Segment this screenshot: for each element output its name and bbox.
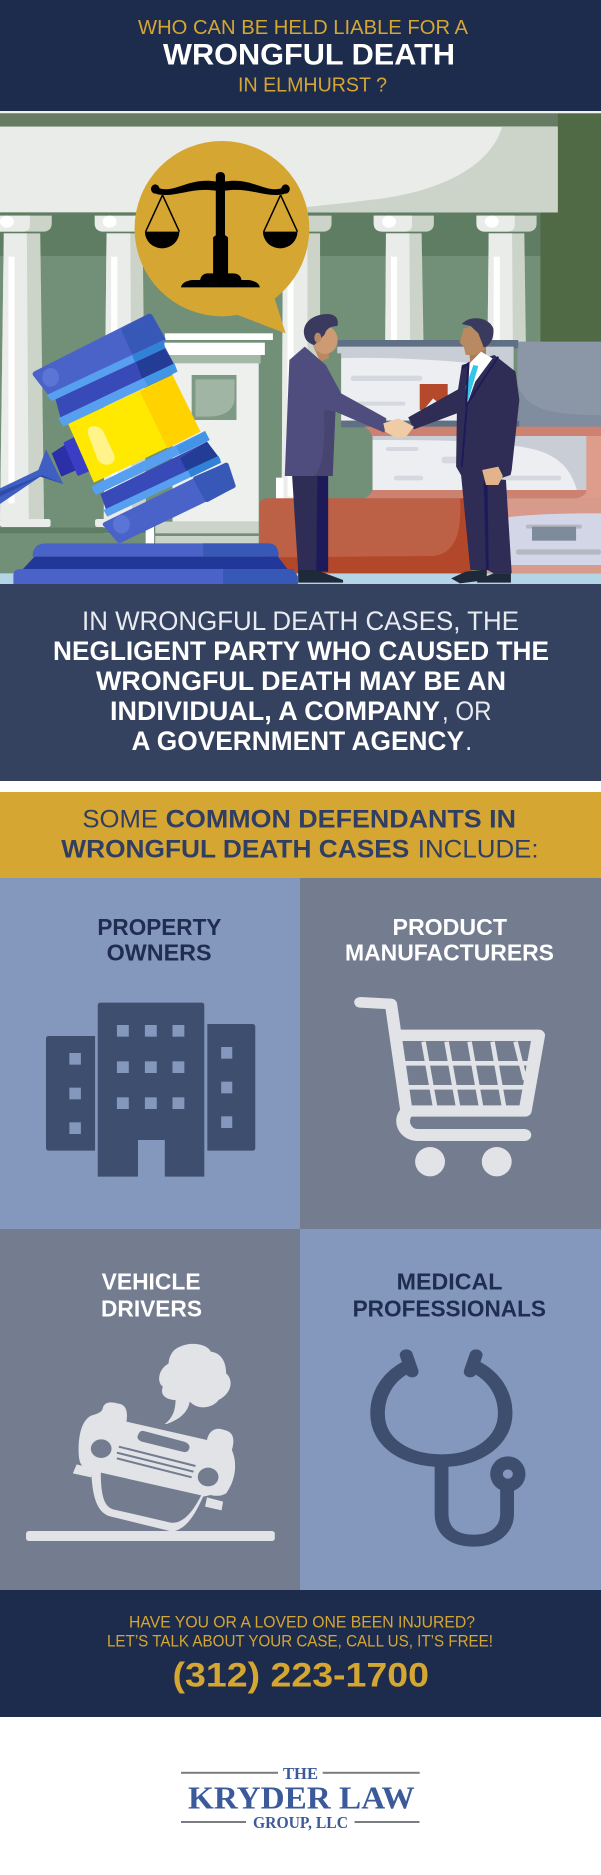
businessman left: [285, 314, 386, 583]
title line 2: WRONGFUL DEATH: [163, 39, 455, 72]
intro line 1: IN WRONGFUL DEATH CASES, THE: [82, 606, 519, 636]
call to action line 1: HAVE YOU OR A LOVED ONE BEEN INJURED?: [129, 1613, 475, 1631]
title banner: [0, 0, 601, 113]
logo: The Kryder Law Group: KRYDER LAW: [188, 1779, 415, 1815]
panel: common defendants heading: [0, 792, 601, 878]
label: vehicle drivers: DRIVERS: [101, 1296, 202, 1322]
stacked books: [259, 340, 601, 573]
call to action banner: [0, 1590, 601, 1717]
logo: The Kryder Law Group: GROUP, LLC: [253, 1813, 348, 1832]
intro line 5: A GOVERNMENT AGENCY: [132, 726, 464, 756]
panel: property owners: [0, 878, 300, 1229]
illustration: courthouse scene: [0, 113, 601, 584]
icon: office buildings: [46, 1003, 255, 1177]
label: property owners: [97, 914, 221, 966]
label: product manufacturers: PRODUCT: [392, 914, 507, 940]
heading line 1: COMMON DEFENDANTS IN: [166, 805, 516, 833]
intro line 5: .: [465, 726, 472, 756]
label: medical professionals: PROFESSIONALS: [353, 1296, 546, 1322]
panel: medical professionals: [300, 1229, 601, 1590]
panel: vehicle drivers: [0, 1229, 300, 1590]
building base and floor: [0, 519, 601, 584]
label: product manufacturers: MANUFACTURERS: [345, 940, 554, 966]
icon: shopping cart: [360, 1002, 539, 1176]
title line 1: WHO CAN BE HELD LIABLE FOR A: [138, 16, 468, 39]
logo: The Kryder Law Group: THE: [283, 1764, 318, 1783]
speech bubble with scales of justice: [135, 141, 309, 333]
gavel: [0, 317, 233, 541]
heading line 2: [61, 835, 539, 863]
businessman right: [408, 318, 519, 583]
heading line 1: SOME: [82, 805, 158, 833]
call to action line 2: LET’S TALK ABOUT YOUR CASE, CALL US, IT’S FREE!: [107, 1632, 493, 1650]
icon: stethoscope: [378, 1355, 525, 1541]
label: property owners: PROPERTY: [97, 914, 221, 940]
intro line 3: WRONGFUL DEATH MAY BE AN: [96, 666, 506, 696]
columns: [0, 216, 537, 547]
label: vehicle drivers: VEHICLE: [102, 1269, 201, 1295]
panel: product manufacturers: [300, 878, 601, 1229]
heading line 2: INCLUDE:: [418, 835, 539, 863]
handshake: [383, 418, 414, 438]
phone number: (312) 223-1700: [172, 1657, 429, 1695]
intro line 2: NEGLIGENT PARTY WHO CAUSED THE: [53, 636, 549, 666]
label: vehicle drivers: [101, 1269, 202, 1322]
gavel sound block: [13, 543, 298, 584]
scales icon: [145, 172, 297, 287]
icon: overturned car with smoke: [26, 1344, 275, 1541]
label: property owners: OWNERS: [107, 940, 212, 966]
title line 3: IN ELMHURST ?: [238, 73, 387, 96]
logo: The Kryder Law Group: [181, 1764, 420, 1832]
intro line 4: INDIVIDUAL, A COMPANY: [110, 696, 440, 726]
central doorway block: [155, 333, 273, 544]
heading line 2: WRONGFUL DEATH CASES: [61, 835, 409, 863]
label: product manufacturers: [345, 914, 554, 966]
label: medical professionals: MEDICAL: [397, 1269, 503, 1295]
label: medical professionals: [353, 1269, 546, 1322]
intro line 4: , OR: [442, 696, 492, 726]
panel: intro statement: [0, 584, 601, 781]
